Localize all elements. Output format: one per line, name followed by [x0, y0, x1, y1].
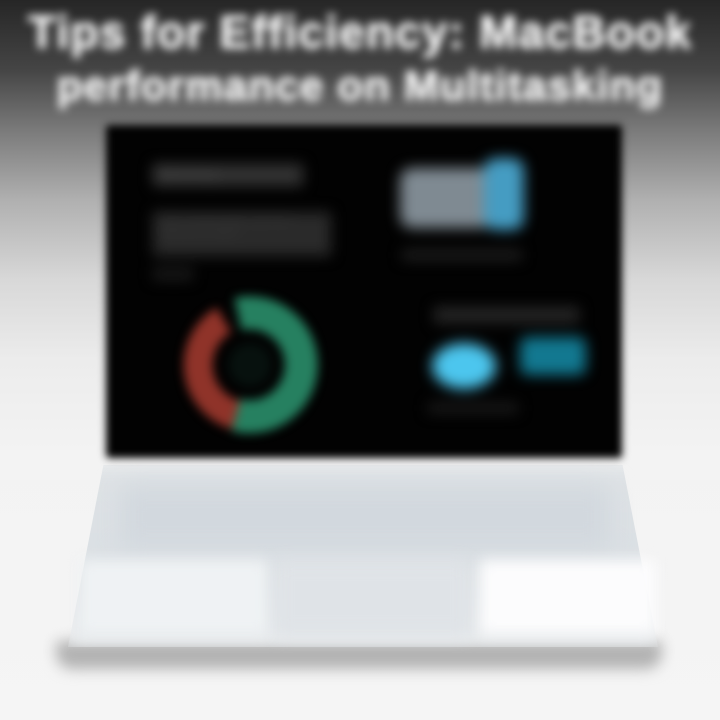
title — [22, 6, 696, 115]
text panel: heading and lines — [147, 158, 336, 282]
donut centre — [228, 343, 272, 387]
laptop base — [49, 465, 669, 677]
caption bar — [402, 250, 522, 260]
title: Tips for Efficiency: MacBook — [28, 6, 692, 58]
green arc — [236, 313, 301, 417]
keyboard deck — [68, 465, 658, 647]
base bottom edge — [56, 641, 662, 669]
trackpad — [275, 561, 470, 635]
left palm rest — [80, 560, 268, 634]
title: performance on Multitasking — [57, 62, 663, 109]
donut chart — [176, 290, 324, 440]
screen content — [147, 147, 596, 440]
red arc — [198, 320, 236, 415]
panel heading: Memory — [153, 164, 218, 184]
right palm rest — [480, 560, 656, 634]
caption bar — [428, 403, 518, 413]
grey block — [400, 168, 492, 228]
cloud bars — [422, 302, 596, 414]
bright blue oval — [432, 343, 496, 389]
dark blue block — [520, 337, 586, 375]
panel heading — [153, 164, 303, 186]
chip chart — [390, 147, 535, 264]
panel text lines: Close unused apps and free memory for tasks — [153, 213, 291, 239]
blue block — [484, 158, 524, 230]
keyboard area — [120, 485, 610, 549]
heading bar — [434, 307, 579, 323]
panel text lines — [153, 212, 331, 256]
panel short line — [153, 268, 193, 280]
laptop screen — [106, 125, 622, 458]
